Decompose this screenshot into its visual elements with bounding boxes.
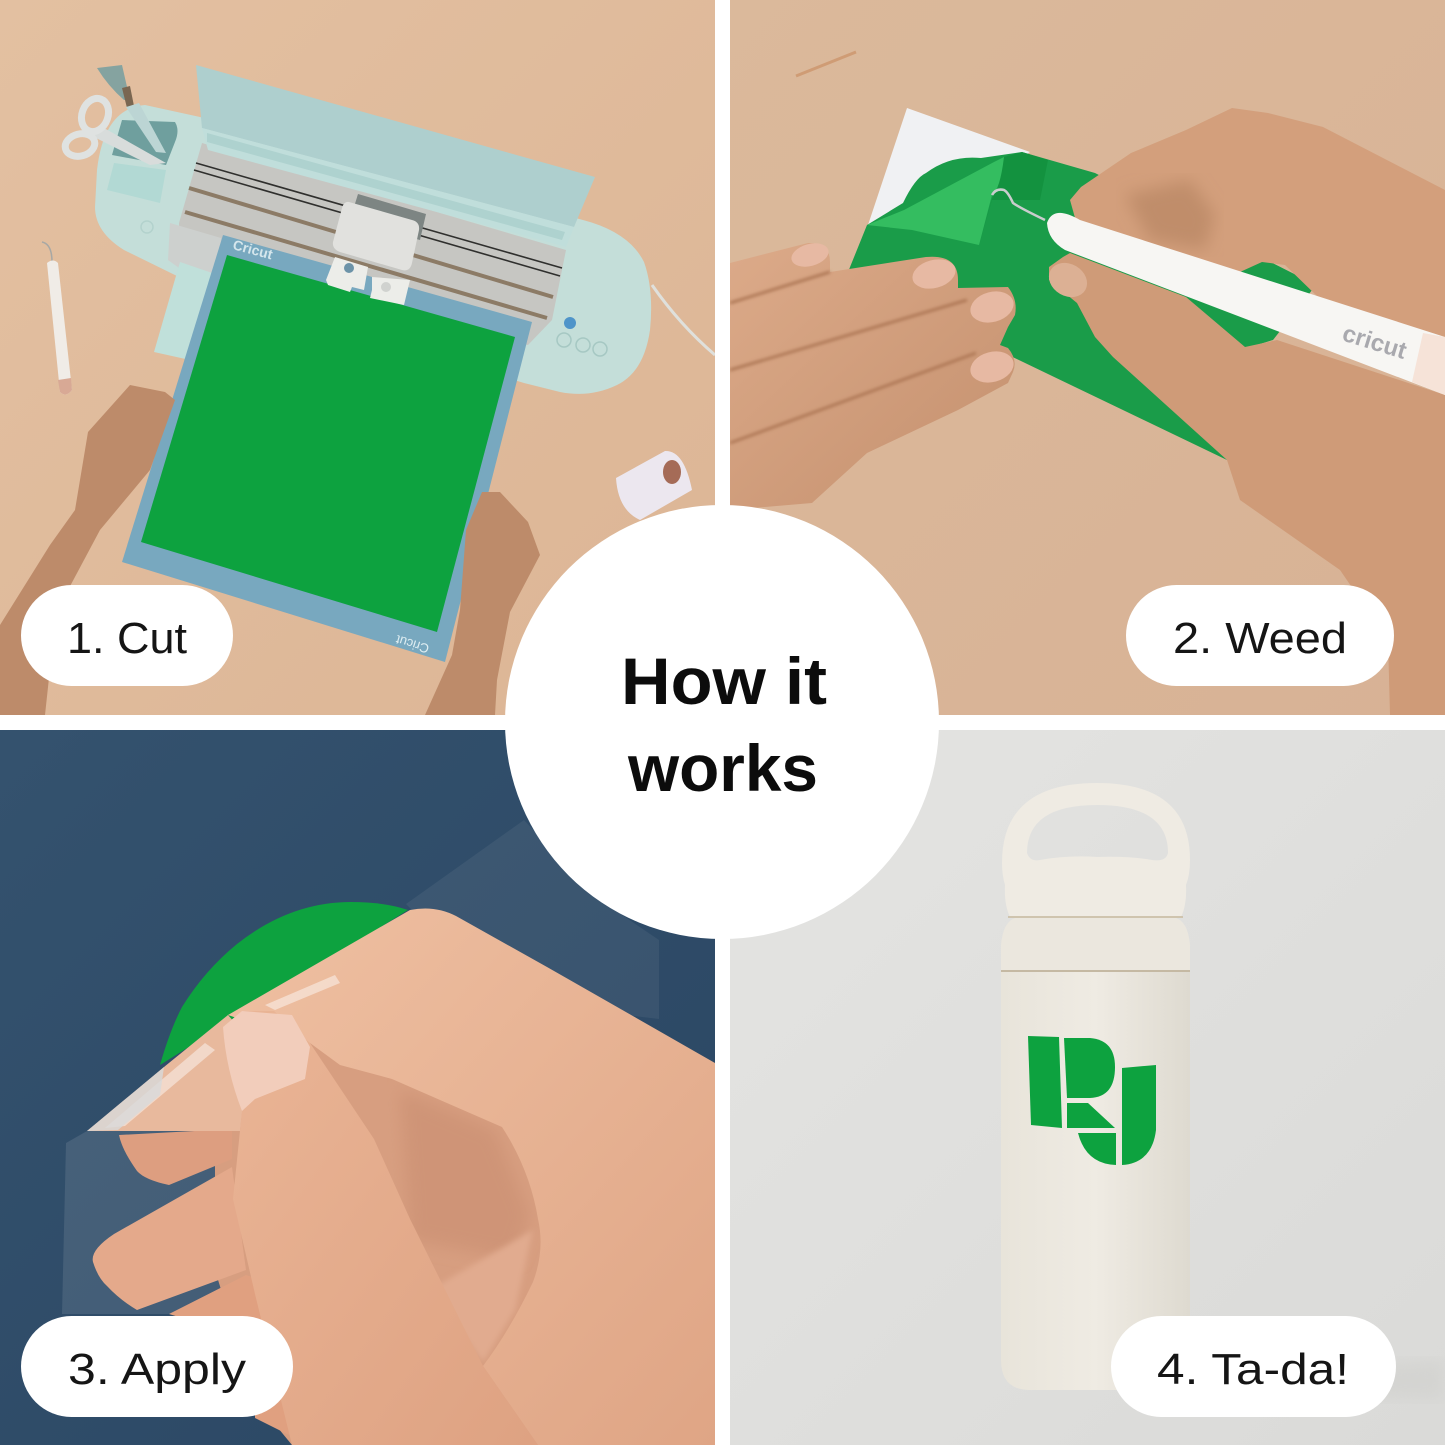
label: 1. Cut: 1. Cut <box>67 614 187 663</box>
label: 4. Ta-da! <box>1111 1316 1396 1417</box>
cutting mat: Cricut <box>394 632 431 656</box>
transfer tape <box>62 820 659 1314</box>
label: 2. Weed: 2. Weed <box>1173 614 1347 663</box>
label: 3. Apply: 3. Apply <box>68 1345 246 1394</box>
fingernails <box>789 239 1017 387</box>
icon: hand with index finger <box>87 908 715 1445</box>
green vinyl sheet <box>141 255 515 632</box>
icon: weeding pen: cricut <box>1339 320 1410 365</box>
label: 1. Cut <box>21 585 233 686</box>
panel: step 1 cut <box>0 0 715 715</box>
title: How it <box>621 644 827 718</box>
panel: step 2 weed <box>730 0 1445 715</box>
icon: green RJ logo <box>1028 1036 1156 1165</box>
cutting mat: Cricut <box>231 236 275 262</box>
icon: scissors and tools <box>63 65 166 165</box>
label: 2. Weed <box>1126 585 1394 686</box>
icon: cutting machine <box>95 65 651 394</box>
panel: step 4 ta-da <box>730 730 1445 1445</box>
icon: bottle <box>1001 783 1190 1390</box>
bottle shadow <box>1190 1360 1445 1400</box>
panel: step 3 apply <box>0 730 715 1445</box>
icon: right hand <box>425 492 540 715</box>
icon: weeding pen <box>992 190 1445 395</box>
label: 3. Apply <box>21 1316 293 1417</box>
green vinyl circle <box>160 902 408 1065</box>
icon: weeding tool <box>42 242 72 395</box>
cutting mat <box>122 235 532 662</box>
icon: thumb <box>223 1011 538 1445</box>
icon: cordless tool <box>616 451 692 520</box>
label: 4. Ta-da!: 4. Ta-da! <box>1157 1345 1349 1394</box>
title: works <box>627 731 818 805</box>
icon: left hand <box>0 385 175 715</box>
icon: carriage <box>326 194 426 305</box>
centre circle <box>505 505 939 939</box>
green vinyl <box>846 152 1316 460</box>
icon: right hand <box>1043 108 1445 715</box>
backing paper <box>867 108 1030 228</box>
icon: back fingers <box>92 1042 541 1445</box>
title <box>621 644 827 805</box>
icon: left hand <box>730 239 1017 510</box>
icon: power cable <box>652 285 715 355</box>
